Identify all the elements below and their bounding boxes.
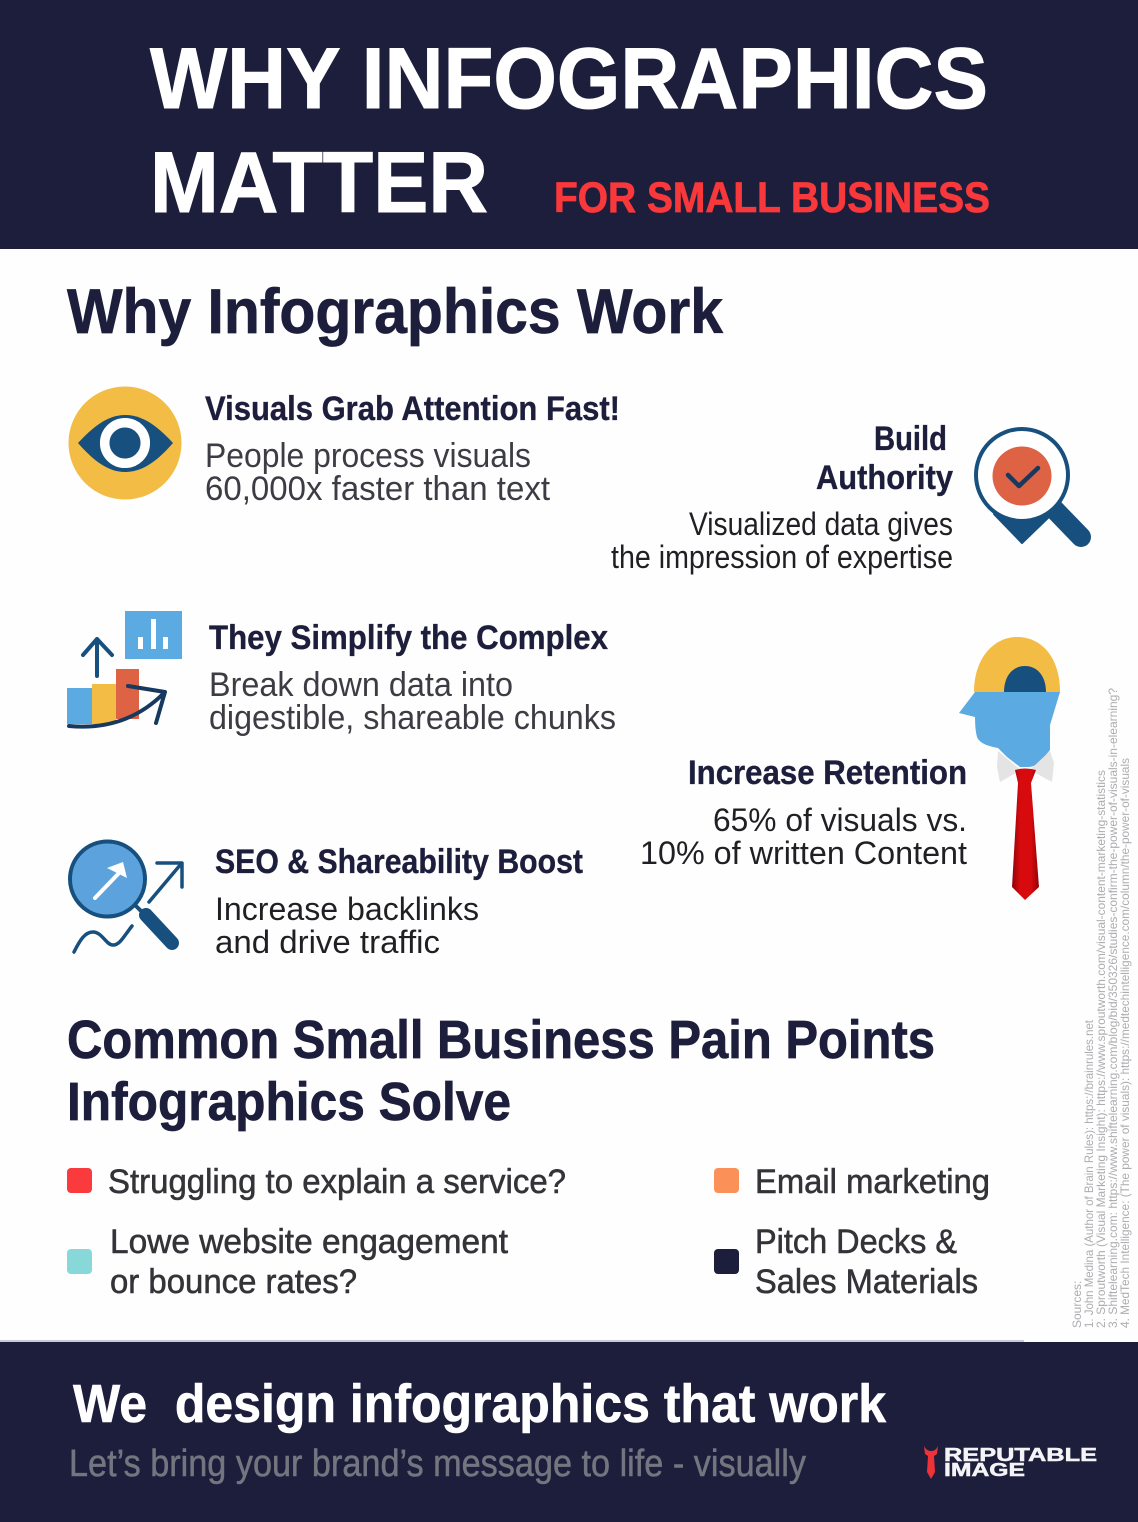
pain point: website engagement: or bounce rates? [110, 1263, 357, 1301]
sources [1070, 688, 1132, 1328]
header banner [0, 0, 1138, 249]
pain point: explain a service: Struggling to explain a service? [108, 1163, 566, 1201]
logo [924, 1445, 1097, 1480]
sources: 4. MedTech Intelligence: (The power of visuals): https://medtechintelligence.com/column/the-power-of-visuals [1118, 758, 1132, 1328]
item: build authority: Visualized data gives [689, 506, 953, 542]
logo: REPUTABLE [944, 1445, 1097, 1465]
title: WHY INFOGRAPHICS [150, 31, 988, 127]
item: seo and shareability: SEO & Shareability Boost [215, 843, 583, 881]
pain point: email marketing: Email marketing [755, 1163, 990, 1201]
item: increase retention: 10% of written Content [640, 835, 967, 871]
sources: Sources: [1070, 1281, 1084, 1328]
pain point: pitch decks: Sales Materials [755, 1263, 978, 1301]
item: seo and shareability: and drive traffic [215, 924, 440, 960]
item: simplify the complex: Break down data into [209, 666, 513, 704]
item: simplify the complex: digestible, shareable chunks [209, 699, 616, 737]
item: simplify the complex [209, 619, 616, 737]
heading: pain points: Infographics Solve [67, 1072, 511, 1132]
item: increase retention: 65% of visuals vs. [713, 802, 967, 838]
item: build authority: Authority [816, 459, 953, 497]
sources: 1. John Medina (Author of Brain Rules): https://brainrules.net [1082, 1019, 1096, 1328]
item: simplify the complex: They Simplify the Complex [209, 619, 608, 657]
icon: bar chart with arrows [67, 611, 182, 727]
item: visuals grab attention: People process visuals [205, 437, 531, 475]
item: visuals grab attention [205, 390, 620, 508]
pain point: pitch decks: Pitch Decks & [755, 1223, 957, 1261]
pain point: website engagement: Lowe website engagement [110, 1223, 509, 1261]
item: seo and shareability [215, 843, 583, 960]
icon: eye [68, 386, 182, 500]
pain point: pitch decks [714, 1223, 978, 1301]
item: seo and shareability: Increase backlinks [215, 891, 479, 927]
item: build authority [611, 420, 953, 575]
icon: magnifier with check [976, 429, 1081, 543]
item: visuals grab attention: 60,000x faster than text [205, 470, 551, 508]
item: visuals grab attention: Visuals Grab Attention Fast! [205, 390, 620, 428]
footer banner [0, 1342, 1138, 1522]
sources: 3. Shiftelearning.com: https://www.shiftelearning.com/blog/bid/350326/studies-confirm-the-power-of-visuals-in-elearning? [1106, 688, 1120, 1328]
title [150, 31, 988, 231]
heading: pain points [67, 1010, 935, 1132]
pain point: website engagement [67, 1223, 509, 1301]
item: increase retention: Increase Retention [688, 754, 967, 792]
item: increase retention [640, 754, 967, 871]
sources: 2. Sproutworth (Visual Marketing Insight): https://www.sproutworth.com/visual-content-marketing-statistics [1094, 770, 1108, 1328]
heading: why infographics work: Why Infographics Work [67, 277, 724, 347]
logo: IMAGE [944, 1460, 1025, 1480]
footer headline: We design infographics that work [73, 1374, 887, 1434]
title: MATTER [150, 135, 488, 231]
subtitle: FOR SMALL BUSINESS [554, 174, 990, 222]
icon: search magnifier with growth [70, 842, 182, 952]
heading: pain points: Common Small Business Pain Points [67, 1010, 935, 1070]
item: build authority: Build [874, 420, 947, 458]
item: build authority: the impression of expertise [611, 539, 953, 575]
icon: head with tie [959, 637, 1060, 900]
footer tagline: Let’s bring your brand’s message to life - visually [69, 1443, 806, 1485]
